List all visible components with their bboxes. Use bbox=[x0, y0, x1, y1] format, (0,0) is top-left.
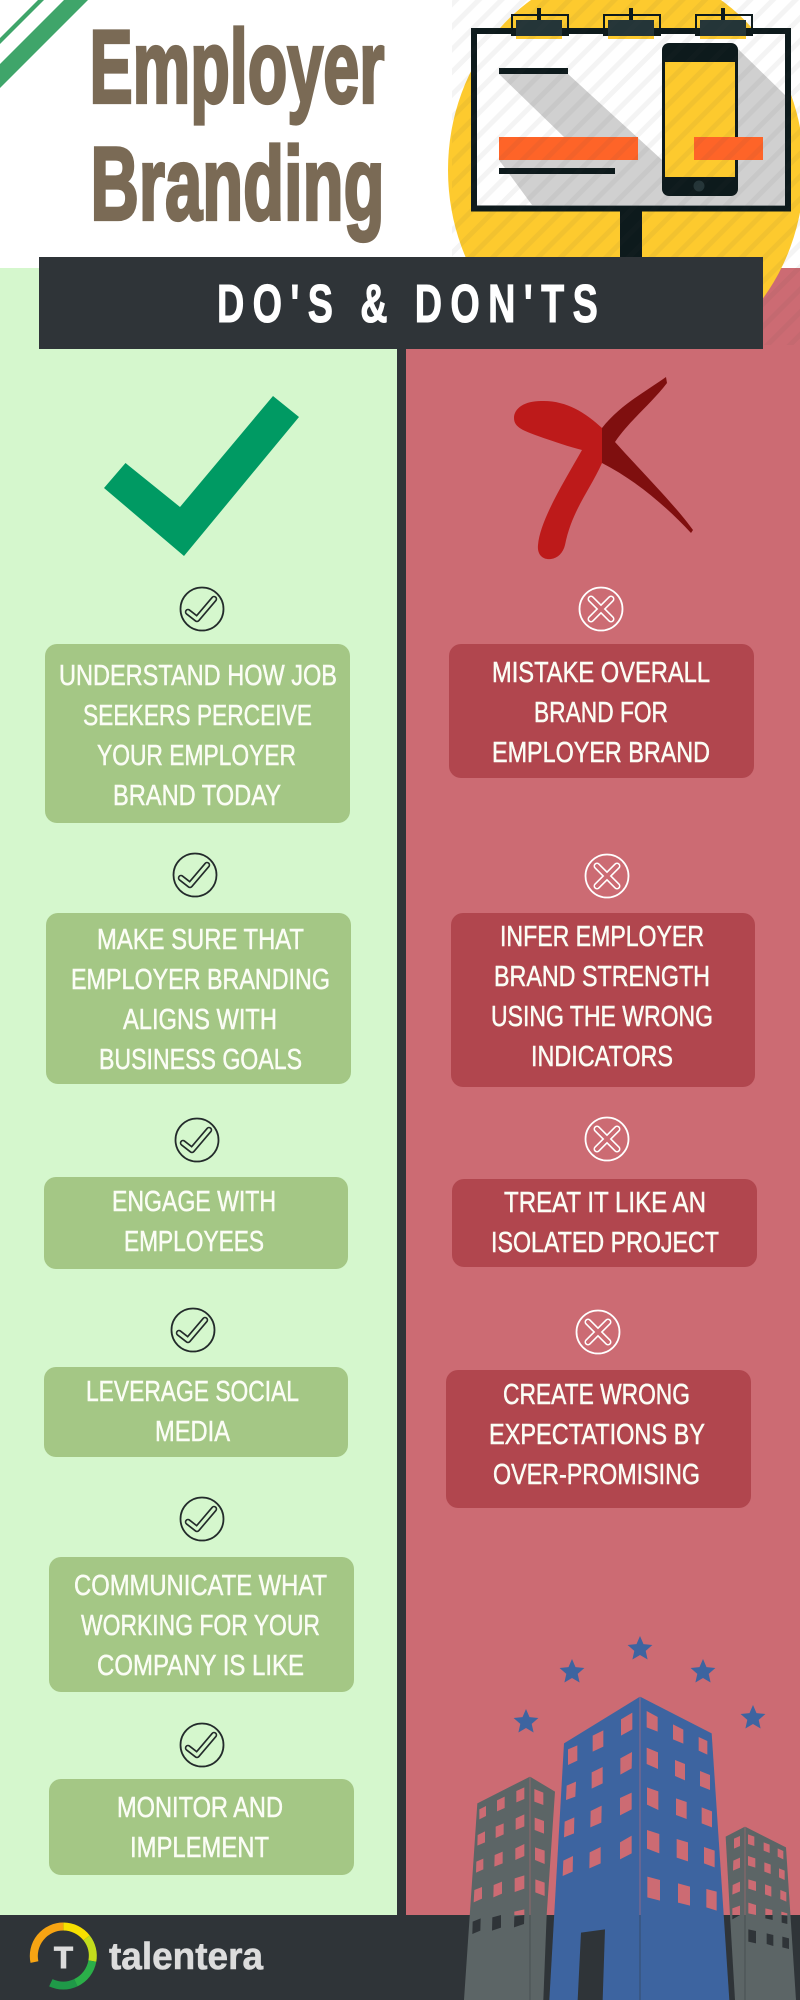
yellow circle backdrop bbox=[448, 0, 800, 298]
icon: billboard bbox=[474, 8, 788, 260]
card: treat it like an isolated project bbox=[452, 1179, 757, 1267]
card: engage with employees: EMPLOYEES bbox=[124, 1226, 264, 1258]
lamps bbox=[512, 8, 752, 39]
icon: buildings bbox=[464, 1697, 796, 2000]
long shadows bbox=[499, 48, 785, 205]
card: create wrong expectations bbox=[446, 1370, 751, 1508]
copy lines bbox=[499, 68, 615, 174]
icon: big red cross bbox=[514, 377, 693, 559]
card: infer employer brand strength: INDICATORS bbox=[531, 1041, 673, 1073]
logo wordmark: talentera bbox=[109, 1936, 264, 1978]
icon: check 5 bbox=[180, 1498, 224, 1540]
card: mistake overall brand bbox=[449, 644, 754, 778]
heading banner bbox=[39, 257, 763, 349]
card: infer employer brand strength: USING THE WRONG bbox=[491, 1001, 713, 1033]
title bbox=[90, 10, 384, 242]
card: make sure branding aligns: ALIGNS WITH bbox=[123, 1004, 277, 1036]
footer bar bbox=[0, 1915, 800, 2000]
card: create wrong expectations: OVER-PROMISING bbox=[493, 1459, 700, 1491]
panel: don'ts list bbox=[446, 588, 757, 1508]
icon: check 6 bbox=[180, 1724, 224, 1766]
card: mistake overall brand: BRAND FOR bbox=[534, 697, 668, 729]
panel: don'ts background bbox=[406, 268, 800, 1915]
icon: five stars bbox=[514, 1636, 765, 1732]
corner stripes bbox=[0, 0, 88, 88]
card: treat it like an isolated project: TREAT IT LIKE AN bbox=[504, 1187, 706, 1219]
card: infer employer brand strength: INFER EMPLOYER bbox=[500, 921, 704, 953]
icon: big green check bbox=[104, 396, 299, 556]
card: make sure branding aligns: BUSINESS GOALS bbox=[99, 1044, 302, 1076]
card: mistake overall brand: MISTAKE OVERALL bbox=[492, 657, 710, 689]
right grey building bbox=[726, 1827, 796, 2000]
card: mistake overall brand: EMPLOYER BRAND bbox=[492, 737, 710, 769]
card: leverage social media: MEDIA bbox=[155, 1416, 231, 1448]
phone bbox=[662, 43, 738, 196]
icon: cross 4 bbox=[576, 1310, 620, 1354]
icon: check 4 bbox=[172, 1308, 214, 1352]
title: Branding bbox=[90, 126, 384, 242]
orange bars bbox=[499, 137, 763, 160]
icon: logo ring bbox=[34, 1926, 93, 1985]
card: create wrong expectations: CREATE WRONG bbox=[503, 1379, 690, 1411]
card: make sure branding aligns: MAKE SURE THAT bbox=[97, 924, 304, 956]
icon: cross 3 bbox=[586, 1118, 628, 1160]
card: communicate what working is like: COMPANY IS LIKE bbox=[97, 1650, 304, 1682]
card: infer employer brand strength: BRAND STRENGTH bbox=[494, 961, 710, 993]
icon: check 2 bbox=[174, 854, 216, 896]
card: understand how job seekers bbox=[45, 644, 350, 823]
card: understand how job seekers: BRAND TODAY bbox=[113, 780, 281, 812]
card: understand how job seekers: UNDERSTAND HOW JOB bbox=[59, 660, 337, 692]
main blue building bbox=[549, 1697, 729, 2000]
icon: check 3 bbox=[176, 1118, 218, 1162]
panel: do's list bbox=[44, 588, 354, 1875]
billboard board bbox=[474, 31, 788, 208]
left grey building bbox=[464, 1777, 555, 2000]
heading banner: DO'S & DON'TS bbox=[217, 273, 598, 334]
card: engage with employees bbox=[44, 1177, 348, 1269]
card: create wrong expectations: EXPECTATIONS BY bbox=[489, 1419, 705, 1451]
card: understand how job seekers: SEEKERS PERCEIVE bbox=[83, 700, 312, 732]
card: infer employer brand strength bbox=[451, 913, 755, 1087]
billboard post bbox=[620, 208, 642, 260]
card: communicate what working is like bbox=[49, 1557, 354, 1692]
card: communicate what working is like: WORKING FOR YOUR bbox=[81, 1610, 320, 1642]
card: leverage social media: LEVERAGE SOCIAL bbox=[86, 1376, 299, 1408]
card: engage with employees: ENGAGE WITH bbox=[112, 1186, 276, 1218]
card: make sure branding aligns bbox=[46, 913, 351, 1084]
card: monitor and implement bbox=[49, 1779, 354, 1875]
card: communicate what working is like: COMMUNICATE WHAT bbox=[74, 1570, 327, 1602]
logo: talentera bbox=[34, 1926, 264, 1985]
icon: check 1 bbox=[180, 588, 224, 630]
panel: do's background bbox=[0, 268, 397, 1915]
card: make sure branding aligns: EMPLOYER BRANDING bbox=[71, 964, 330, 996]
card: understand how job seekers: YOUR EMPLOYER bbox=[97, 740, 296, 772]
card: leverage social media bbox=[44, 1367, 348, 1457]
logo letter: T bbox=[54, 1940, 73, 1975]
icon: cross 2 bbox=[586, 854, 628, 898]
icon: cross 1 bbox=[580, 588, 622, 630]
diagonal stripe texture bbox=[452, 0, 800, 345]
column divider bbox=[397, 268, 406, 1915]
card: monitor and implement: IMPLEMENT bbox=[130, 1832, 269, 1864]
title: Employer bbox=[90, 10, 384, 126]
card: treat it like an isolated project: ISOLATED PROJECT bbox=[491, 1227, 719, 1259]
card: monitor and implement: MONITOR AND bbox=[117, 1792, 283, 1824]
